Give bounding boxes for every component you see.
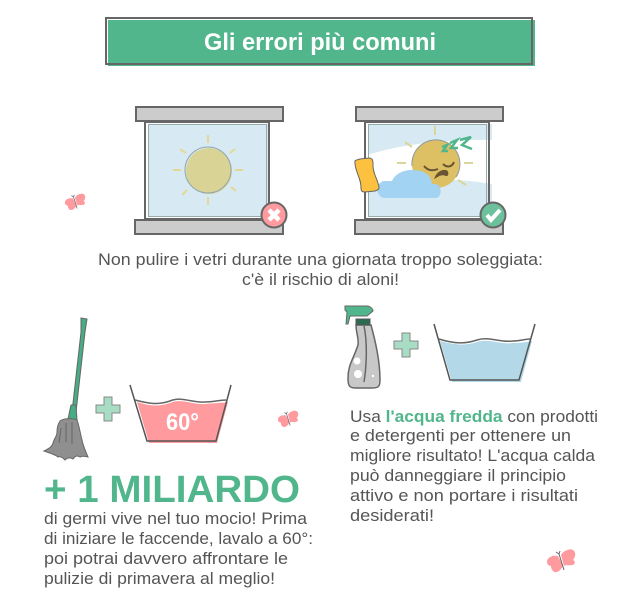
icon: spray bottle: [345, 306, 380, 388]
icon: plus: [96, 397, 120, 421]
callout: cold water: [350, 407, 598, 525]
caption: sunny windows: c'è il rischio di aloni!: [242, 270, 399, 289]
title banner: Gli errori più comuni: [204, 29, 436, 56]
cloud: [378, 170, 441, 198]
icon: basin of cold water: [434, 324, 535, 382]
icon: plus right: [394, 333, 418, 357]
headline stat: + 1 MILIARDO: [44, 469, 300, 511]
butterfly left: [65, 194, 85, 210]
callout: mop germs: [44, 509, 313, 588]
caption: sunny windows: Non pulire i vetri durante una giornata troppo soleggiata:: [98, 250, 543, 269]
icon: basin at 60 degrees: [130, 385, 231, 443]
caption: sunny windows: [98, 250, 543, 289]
callout: mop germs: poi potrai davvero affrontare le: [44, 549, 288, 568]
callout: cold water: può danneggiare il principio: [350, 466, 566, 485]
callout: cold water: desiderati!: [350, 506, 434, 525]
callout: mop germs: di iniziare le faccende, lavalo a 60°:: [44, 529, 313, 548]
sun face: [397, 126, 473, 188]
icon: basin at 60 degrees: 60°: [166, 409, 199, 436]
butterfly middle: [278, 411, 298, 427]
callout: cold water: attivo e non portare i risultati: [350, 486, 578, 505]
sleep letters: [442, 137, 472, 151]
icon: cloudy window with sponge and right mark: [355, 107, 506, 234]
sponge: [355, 158, 379, 192]
callout: cold water: e detergenti per ottenere un: [350, 426, 571, 445]
callout: cold water: migliore risultato! L'acqua calda: [350, 446, 596, 465]
callout: cold water: Usa l'acqua fredda con prodotti: [350, 407, 598, 426]
butterfly bottom right: [547, 549, 575, 572]
icon: sunny window with wrong mark: [135, 107, 286, 234]
icon: mop: [44, 318, 88, 460]
title banner: [106, 18, 535, 66]
callout: mop germs: pulizie di primavera al meglio!: [44, 569, 275, 588]
callout: mop germs: di germi vive nel tuo mocio! Prima: [44, 509, 308, 528]
